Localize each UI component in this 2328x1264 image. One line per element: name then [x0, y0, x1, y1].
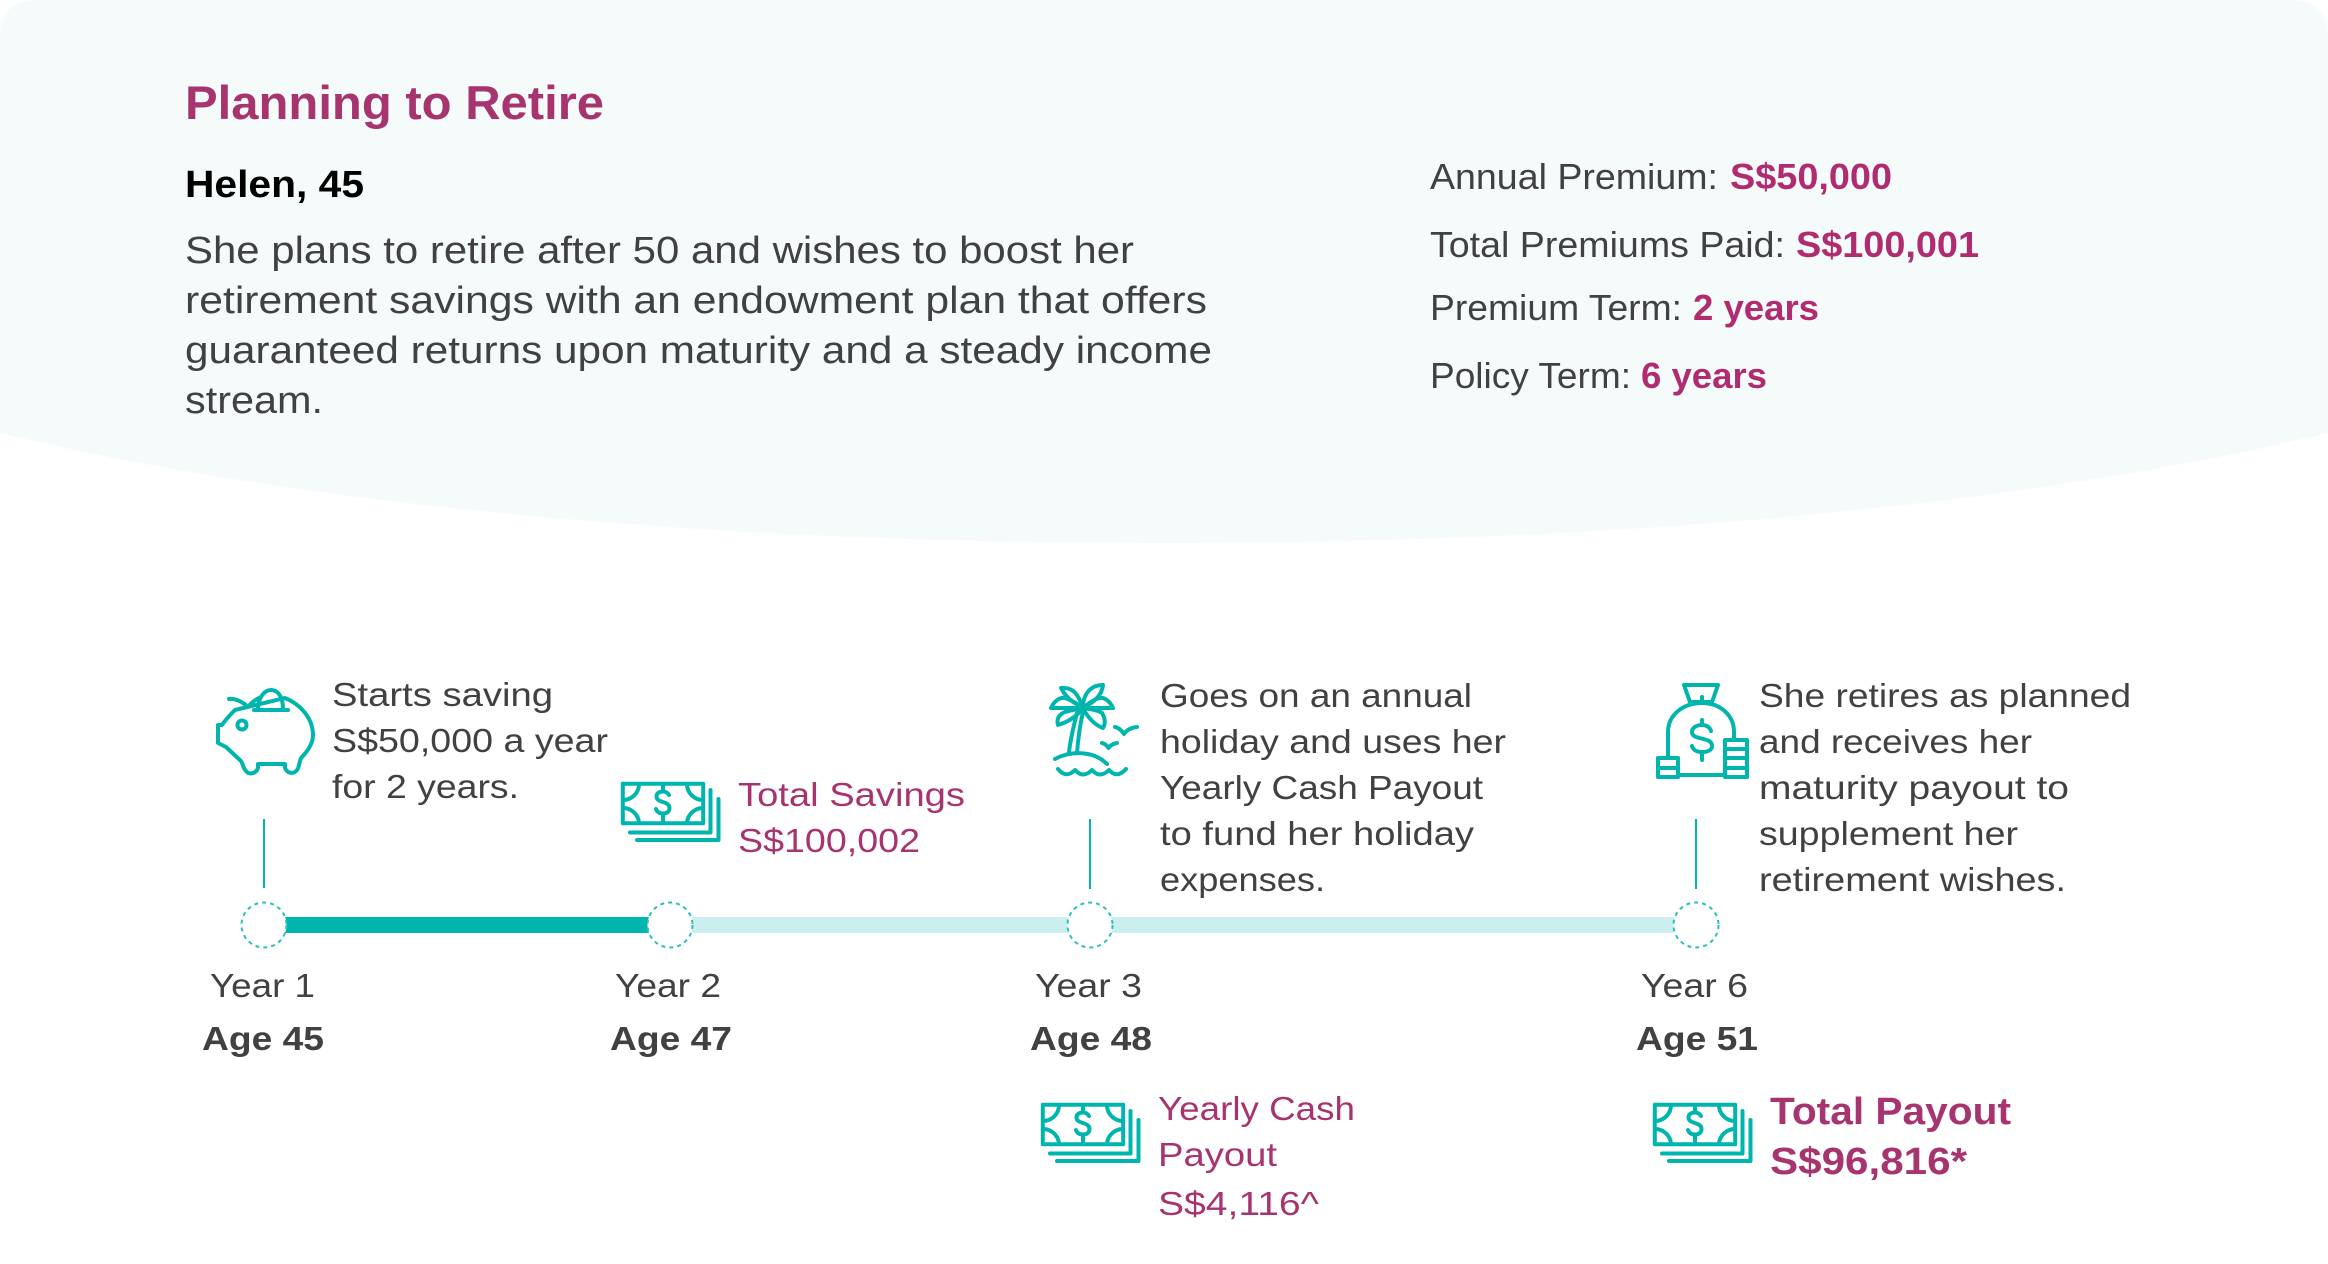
text block: persona description: stream.: [185, 380, 323, 422]
label: year 1 / age 45: Age 45: [202, 1020, 324, 1057]
label: year 3 / age 48: Year 3: [1035, 967, 1142, 1004]
total premiums paid: S$100,001: [1796, 224, 1979, 265]
callout: total savings: [738, 776, 965, 859]
marker: year 1: [242, 819, 286, 948]
marker: year 2: [648, 902, 692, 948]
text block: year 3: Yearly Cash Payout: [1160, 769, 1483, 806]
text block: year 1: Starts saving: [332, 676, 553, 713]
text block: year 3: holiday and uses her: [1160, 723, 1506, 760]
text block: year 6: [1759, 677, 2131, 898]
label: year 1 / age 45: [202, 967, 324, 1057]
icon: cash stack, total savings: [623, 784, 718, 840]
label: year 2 / age 47: Age 47: [610, 1020, 732, 1057]
text block: year 3: Goes on an annual: [1160, 677, 1472, 714]
bar: remaining term: [692, 917, 1674, 933]
total premiums paid: Total Premiums Paid:: [1430, 224, 1785, 265]
label: year 6 / age 51: Year 6: [1641, 967, 1748, 1004]
premium term: 2 years: [1693, 287, 1819, 328]
title: Planning to Retire: [185, 76, 604, 129]
text block: year 6: supplement her: [1759, 815, 2018, 852]
text block: year 3: [1160, 677, 1506, 898]
premium term: Premium Term:: [1430, 287, 1682, 328]
callout: total payout: Total Payout: [1770, 1091, 2011, 1133]
callout: yearly cash payout: S$4,116^: [1158, 1185, 1320, 1222]
text block: persona description: guaranteed returns upon maturity and a steady income: [185, 330, 1212, 372]
label: year 6 / age 51: Age 51: [1636, 1020, 1758, 1057]
callout: total payout: [1770, 1091, 2011, 1183]
label: year 3 / age 48: Age 48: [1030, 1020, 1152, 1057]
label: year 1 / age 45: Year 1: [210, 967, 315, 1004]
callout: yearly cash payout: [1158, 1090, 1355, 1222]
icon: piggy bank: [218, 690, 313, 773]
text block: persona description: [185, 230, 1212, 422]
text block: year 6: retirement wishes.: [1759, 861, 2066, 898]
label: year 3 / age 48: [1030, 967, 1152, 1057]
callout: yearly cash payout: Yearly Cash: [1158, 1090, 1355, 1127]
policy term: [1430, 355, 1767, 396]
callout: yearly cash payout: Payout: [1158, 1136, 1277, 1173]
text block: year 6: maturity payout to: [1759, 769, 2069, 806]
policy term: 6 years: [1641, 355, 1767, 396]
text block: year 3: to fund her holiday: [1160, 815, 1475, 852]
total premiums paid: [1430, 224, 1979, 265]
label: year 6 / age 51: [1636, 967, 1758, 1057]
callout: total savings: Total Savings: [738, 776, 965, 813]
text block: year 6: and receives her: [1759, 723, 2032, 760]
premium term: [1430, 287, 1819, 328]
annual premium: S$50,000: [1730, 156, 1892, 197]
text block: year 6: She retires as planned: [1759, 677, 2131, 714]
text block: year 1: S$50,000 a year: [332, 722, 608, 759]
panel: header background: [0, 0, 2328, 543]
icon: cash stack, yearly cash payout: [1043, 1105, 1138, 1161]
icon: cash stack, total payout: [1655, 1105, 1750, 1161]
text block: year 1: for 2 years.: [332, 768, 519, 805]
marker: year 3: [1068, 819, 1112, 948]
callout: total payout: S$96,816*: [1770, 1141, 1967, 1183]
text block: year 3: expenses.: [1160, 861, 1325, 898]
timeline: [242, 819, 1718, 948]
text block: persona description: She plans to retire after 50 and wishes to boost her: [185, 230, 1134, 272]
annual premium: [1430, 156, 1892, 197]
label: year 2 / age 47: Year 2: [615, 967, 721, 1004]
heading: persona name: Helen, 45: [185, 164, 364, 206]
marker: year 6: [1674, 819, 1718, 948]
text block: policy details: [1430, 156, 1979, 396]
icon: palm tree island: [1051, 685, 1137, 774]
policy term: Policy Term:: [1430, 355, 1631, 396]
label: year 2 / age 47: [610, 967, 732, 1057]
annual premium: Annual Premium:: [1430, 156, 1718, 197]
callout: total savings: S$100,002: [738, 822, 920, 859]
text block: year 1: [332, 676, 608, 805]
icon: money bag: [1658, 685, 1747, 777]
text block: persona description: retirement savings with an endowment plan that offers: [185, 280, 1207, 322]
bar: contribution period: [285, 917, 650, 933]
